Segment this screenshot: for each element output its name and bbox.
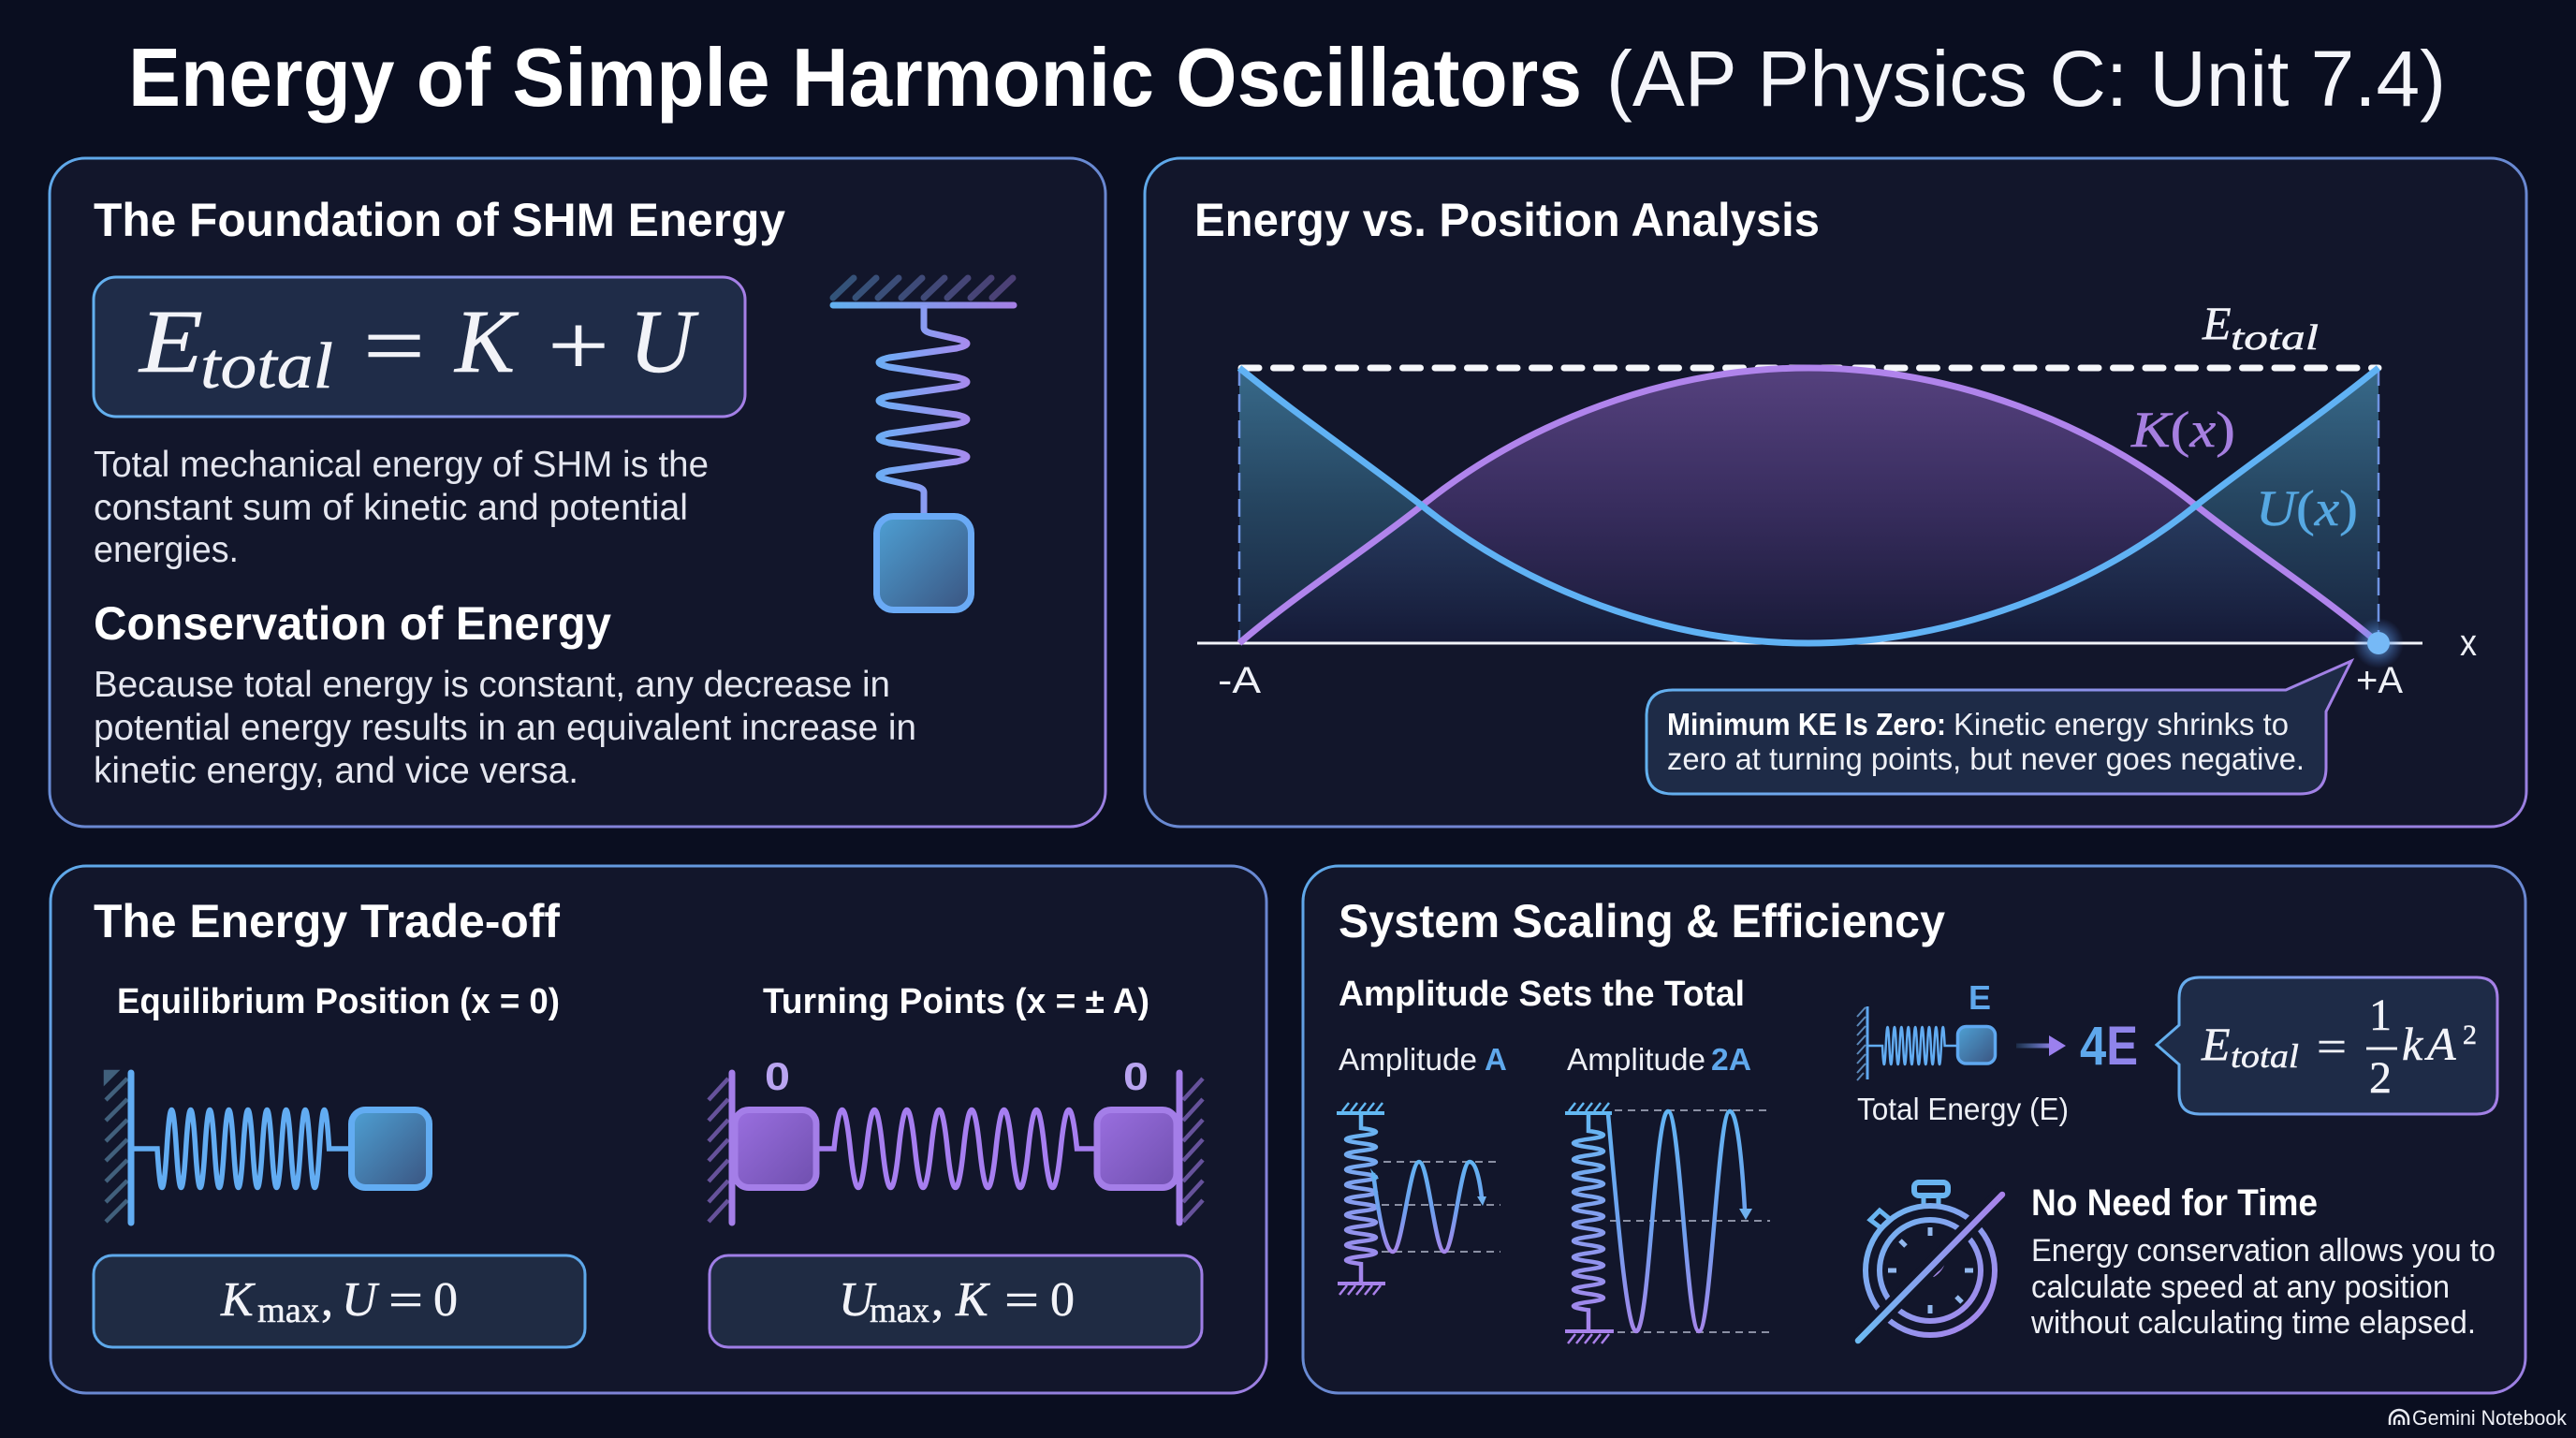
panel: system scaling and efficiency (1303, 866, 2525, 1393)
text: total mechanical energy description: Total mechanical energy of SHM is the (94, 445, 709, 485)
formula box: E total equals half k A squared: 2 (2463, 1020, 2477, 1050)
diagram: spring at turning points: 0 (1123, 1054, 1149, 1098)
chart: energy curves (1197, 368, 2422, 668)
text: conservation description: Because total energy is constant, any decrease in (94, 665, 890, 705)
formula box: total energy: K (453, 291, 520, 391)
text: no need for time description: calculate speed at any position (2031, 1269, 2450, 1305)
label: K(x): K(x) (2130, 402, 2235, 458)
formula box: total energy: E (138, 291, 203, 391)
text: conservation description: potential energy results in an equivalent increase in (94, 708, 916, 748)
title (128, 31, 2446, 124)
text: conservation description (94, 665, 916, 791)
axis label: +A: +A (2356, 660, 2403, 701)
heading: no need for time: No Need for Time (2031, 1182, 2318, 1224)
icon: crossed-out stopwatch (1858, 1182, 2002, 1341)
formula box: E total equals half k A squared: = (2317, 1022, 2347, 1072)
formula box: E total equals half k A squared: 2 (2369, 1053, 2392, 1103)
title: Energy of Simple Harmonic Oscillators (128, 31, 1582, 124)
label: U(x): U(x) (2256, 480, 2358, 536)
panel: the foundation of SHM energy (50, 158, 1105, 827)
callout: minimum KE is zero: Kinetic energy shrinks to (1954, 707, 2289, 741)
formula box: U max: max (870, 1291, 929, 1330)
text: no need for time description (2030, 1233, 2496, 1341)
formula box: total energy: = (363, 298, 425, 393)
diagram: spring and wave amplitude 2A (1565, 1103, 1770, 1343)
label: amplitude A: Amplitude (1339, 1042, 1477, 1077)
heading: foundation: The Foundation of SHM Energy (94, 194, 785, 246)
icon: small horizontal spring (1857, 1006, 1996, 1080)
panel: the energy trade-off (51, 866, 1266, 1393)
subheading: turning points: Turning Points (x = ± A) (763, 982, 1149, 1021)
watermark: Gemini Notebook: Gemini Notebook (2412, 1406, 2568, 1430)
label: E total: E (2202, 297, 2232, 349)
formula box: K max: = (388, 1274, 423, 1328)
label: E total (2202, 297, 2319, 358)
formula box: E total equals half k A squared: total (2231, 1037, 2299, 1075)
label: E total: total (2231, 318, 2319, 358)
formula box: K max: , (321, 1273, 333, 1327)
callout: minimum KE is zero (1647, 661, 2351, 794)
text: total mechanical energy description: constant sum of kinetic and potential (94, 488, 688, 528)
formula box: U max (710, 1255, 1202, 1347)
heading: energy vs position: Energy vs. Position Analysis (1194, 194, 1820, 246)
label: total energy: Total Energy (E) (1857, 1092, 2069, 1126)
formula box: total energy: U (629, 291, 699, 391)
formula box: E total equals half k A squared: E (2201, 1018, 2231, 1070)
formula box: U max: = (1004, 1274, 1039, 1328)
formula box: K max (94, 1255, 585, 1347)
label: amplitude 2A: 2A (1711, 1042, 1751, 1077)
formula box: E total equals half k A squared (2157, 977, 2497, 1114)
icon: hanging spring and mass (833, 278, 1014, 610)
formula box: E total equals half k A squared: A (2424, 1018, 2456, 1070)
text: total mechanical energy description: energies. (94, 530, 239, 570)
label: 4E: 4E (2080, 1016, 2138, 1077)
formula box: K max: max (257, 1291, 319, 1330)
axis label: -A: -A (1218, 660, 1261, 701)
formula box: total energy: + (548, 298, 609, 393)
formula box: K max: K (220, 1273, 256, 1327)
arrow: E to 4E (2016, 1035, 2066, 1056)
label: amplitude A: A (1485, 1042, 1507, 1077)
diagram: spring at equilibrium (106, 1072, 429, 1223)
diagram: spring and wave amplitude A (1337, 1103, 1500, 1295)
heading: trade-off: The Energy Trade-off (94, 895, 560, 947)
diagram: spring at turning points: 0 (765, 1054, 790, 1098)
panel: energy vs position analysis (1145, 158, 2526, 827)
heading: conservation of energy: Conservation of Energy (94, 597, 611, 650)
subheading: equilibrium position: Equilibrium Position (x = 0) (117, 982, 560, 1021)
axis label: x: x (2460, 623, 2477, 664)
formula box: total energy: total (200, 330, 333, 403)
formula box: U max: , (931, 1273, 944, 1327)
formula box: U max: U (839, 1273, 877, 1327)
text: conservation description: kinetic energy, and vice versa. (94, 751, 578, 791)
formula box: K max: U (342, 1273, 380, 1327)
label: E: E (1969, 978, 1991, 1017)
formula box: E total equals half k A squared: k (2402, 1018, 2423, 1070)
text: no need for time description: without calculating time elapsed. (2030, 1305, 2476, 1341)
formula box: U max: 0 (1050, 1273, 1075, 1327)
formula box: K max: 0 (433, 1273, 458, 1327)
text: no need for time description: Energy conservation allows you to (2031, 1233, 2496, 1269)
formula box: E total equals half k A squared: 1 (2369, 990, 2392, 1040)
title: (AP Physics C: Unit 7.4) (1606, 35, 2446, 123)
formula box: total energy (94, 277, 745, 417)
formula box: U max: K (955, 1273, 990, 1327)
label: amplitude 2A: Amplitude (1567, 1042, 1705, 1077)
text: total mechanical energy description (94, 445, 709, 570)
callout: minimum KE is zero: Minimum KE Is Zero: (1667, 707, 1946, 741)
subheading: amplitude sets the total: Amplitude Sets the Total (1339, 975, 1745, 1014)
diagram: spring at turning points (709, 1054, 1203, 1223)
heading: system scaling: System Scaling & Efficiency (1339, 895, 1945, 947)
callout: minimum KE is zero: zero at turning points, but never goes negative. (1667, 741, 2305, 776)
